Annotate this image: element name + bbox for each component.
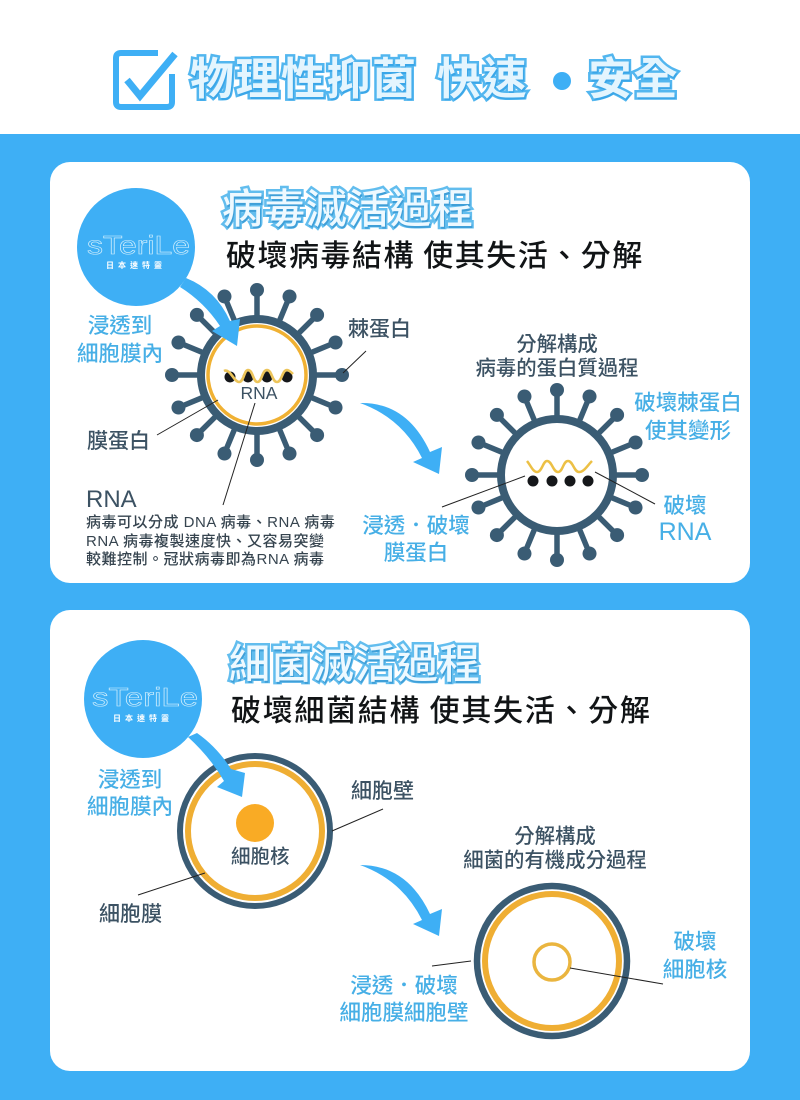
label: penetrate and destroy membrane wall	[339, 974, 468, 1025]
label: penetrate cell membrane: 細胞膜內	[87, 795, 173, 819]
logo subtitle: virus panel: 日本速特靈	[106, 261, 166, 270]
title: 快速	[437, 43, 528, 107]
label: penetrate cell membrane	[87, 768, 173, 819]
RNA body: 較難控制。冠狀病毒即為RNA 病毒	[86, 551, 325, 568]
label: decomposition bacteria	[463, 826, 647, 872]
subheading: bacteria: 破壞細菌結構 使其失活、分解	[231, 686, 652, 730]
label: destroy spike protein: 破壞棘蛋白	[634, 391, 742, 415]
logo circle: bacteria panel	[84, 640, 202, 758]
label: spike protein: 棘蛋白	[348, 318, 411, 341]
label: destroy nucleus	[663, 930, 727, 982]
subheading: virus: 破壞病毒結構 使其失活、分解	[226, 231, 644, 275]
label: destroy spike protein: 使其變形	[645, 419, 731, 443]
label: decomposition: 分解構成	[516, 334, 598, 356]
logo subtitle: bacteria panel: 日本速特靈	[113, 714, 173, 723]
bacterium 1	[180, 756, 330, 906]
label: decomposition: 病毒的蛋白質過程	[475, 358, 639, 380]
virus 1	[165, 283, 349, 467]
label: cell membrane: 細胞膜	[99, 903, 162, 926]
logo circle: virus panel	[77, 188, 195, 306]
virus 2	[465, 383, 649, 567]
RNA body: RNA 病毒複製速度快、又容易突變	[86, 532, 325, 550]
label: decomposition bacteria: 分解構成	[514, 826, 596, 848]
label: destroy RNA: 破壞	[663, 494, 706, 518]
text block: RNA note	[86, 486, 335, 568]
label: penetrate cell membrane: 浸透到	[98, 768, 162, 792]
leader lines: virus	[157, 351, 655, 507]
panel: virus	[50, 162, 750, 583]
label: decomposition	[475, 334, 639, 380]
label: destroy nucleus: 細胞核	[663, 958, 727, 982]
logo circle: virus panel: sTeriLe	[87, 230, 190, 260]
label: penetrate membrane: 浸透到	[88, 314, 152, 338]
label: penetrate and destroy membrane wall: 細胞膜細胞壁	[339, 1001, 468, 1025]
RNA body: 病毒可以分成 DNA 病毒、RNA 病毒	[86, 514, 335, 531]
label: membrane protein: 膜蛋白	[87, 430, 150, 453]
label: penetrate and destroy membrane protein: 浸透．破壞	[362, 514, 470, 538]
leader lines: bacteria	[138, 809, 663, 984]
label: penetrate and destroy membrane protein	[362, 514, 470, 565]
title	[188, 43, 682, 107]
panel: bacteria	[50, 610, 750, 1071]
broken RNA	[527, 461, 594, 486]
label: penetrate membrane: 細胞膜內	[77, 342, 163, 366]
label: destroy RNA: RNA	[659, 518, 711, 546]
RNA helix	[224, 370, 293, 382]
label: penetrate membrane	[77, 314, 163, 366]
label: destroy nucleus: 破壞	[673, 930, 716, 954]
RNA heading: RNA	[86, 486, 137, 513]
bacterium 2	[477, 886, 627, 1036]
heading: bacteria: 細菌滅活過程	[229, 630, 481, 690]
label: RNA in virus: RNA	[241, 383, 277, 403]
label: destroy RNA	[659, 494, 712, 546]
RNA body	[86, 514, 335, 568]
arrow: bacterium to damaged bacterium	[360, 865, 442, 936]
arrow: into bacterium	[188, 733, 245, 797]
label: cell wall: 細胞壁	[351, 780, 414, 803]
arrow: into virus	[180, 278, 240, 346]
icon: checkbox	[113, 50, 178, 110]
label: nucleus: 細胞核	[231, 846, 290, 868]
logo circle: bacteria panel: sTeriLe	[92, 682, 198, 712]
heading: virus: 病毒滅活過程	[222, 175, 474, 235]
title: 物理性抑菌	[190, 43, 418, 107]
label: decomposition bacteria: 細菌的有機成分過程	[463, 850, 647, 872]
label: penetrate and destroy membrane protein: 膜蛋白	[384, 541, 448, 565]
label: penetrate and destroy membrane wall: 浸透．破壞	[350, 974, 458, 998]
arrow: virus to damaged virus	[360, 403, 442, 474]
label: destroy spike protein	[634, 391, 742, 443]
title: 安全	[588, 43, 679, 107]
